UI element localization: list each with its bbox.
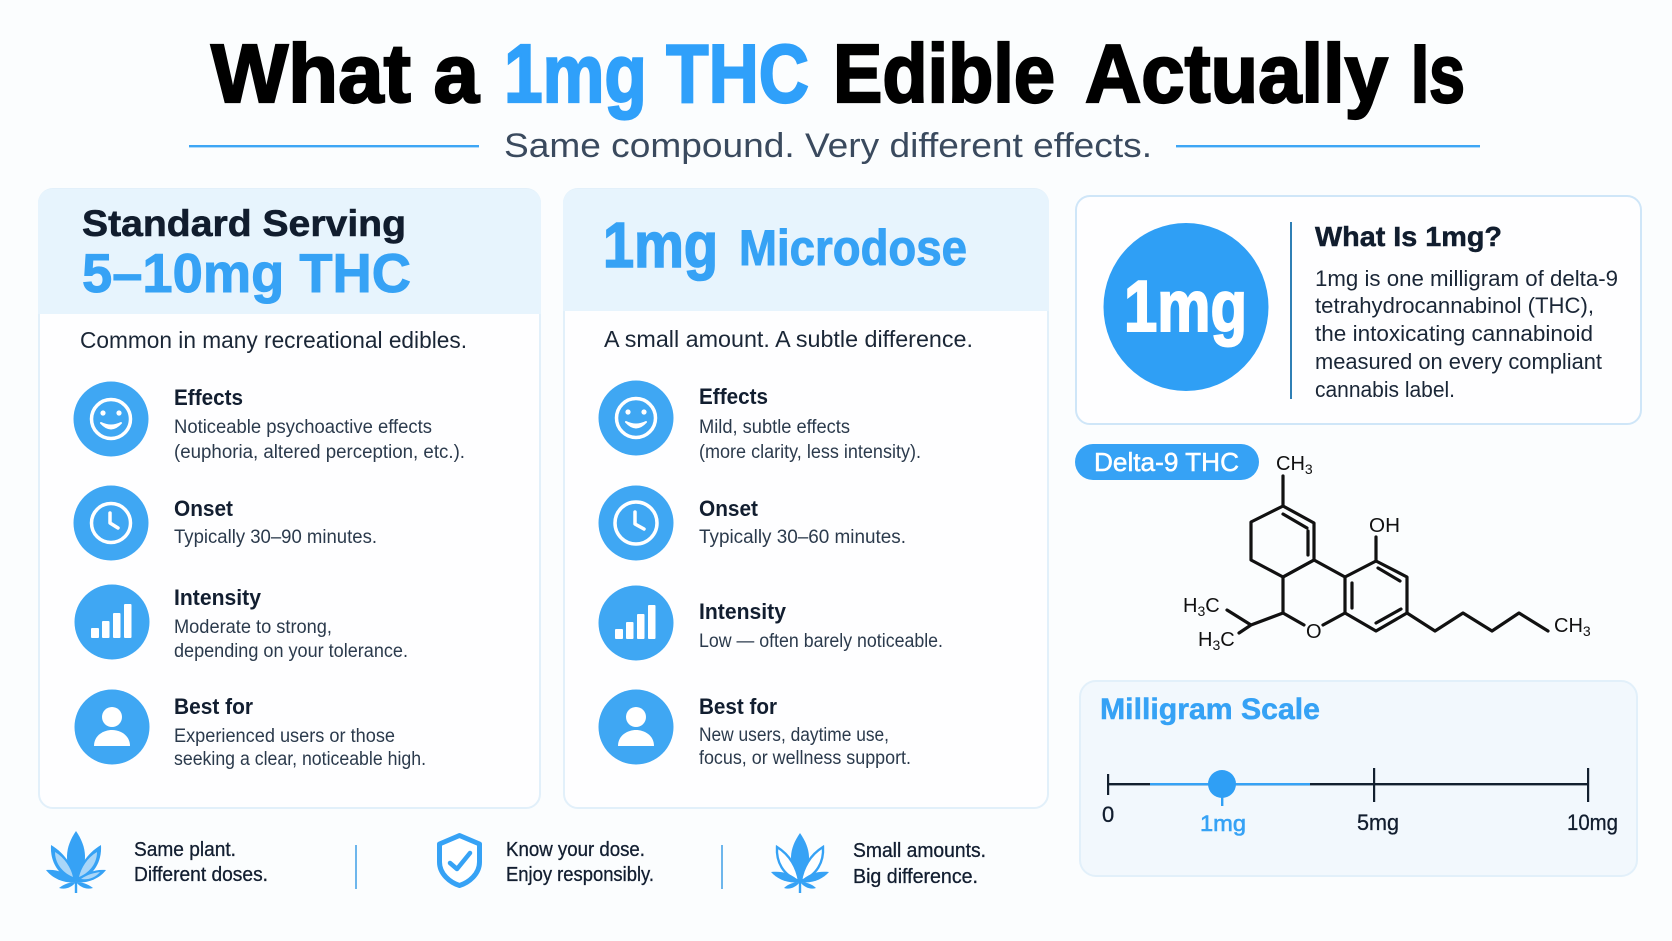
best for text: New users, daytime use,	[699, 725, 889, 746]
best for text	[174, 694, 426, 770]
text	[853, 840, 986, 888]
icon: bars	[74, 584, 150, 660]
1mg badge: 1mg	[1124, 267, 1247, 347]
panel: 1mg microdose	[563, 189, 1049, 808]
effects text	[174, 385, 465, 463]
intensity text: Intensity	[174, 585, 262, 610]
title	[211, 27, 1465, 120]
icon: bars	[598, 586, 674, 660]
label: 5mg: 5mg	[1357, 810, 1399, 835]
title: What a	[211, 27, 480, 120]
effects text: (euphoria, altered perception, etc.).	[174, 442, 465, 463]
text: Small amounts.	[853, 840, 986, 862]
panel: what is 1mg	[1076, 196, 1641, 424]
best for text: seeking a clear, noticeable high.	[174, 749, 426, 770]
pill: delta-9 THC	[1075, 444, 1259, 480]
effects text: Mild, subtle effects	[699, 417, 850, 438]
best for text: focus, or wellness support.	[699, 748, 911, 769]
heading: 1mg microdose: Microdose	[739, 220, 967, 276]
effects text: Effects	[174, 385, 243, 410]
label: H3C lower: C	[1220, 629, 1235, 651]
onset text: Typically 30–90 minutes.	[174, 527, 377, 548]
label: CH3 right: CH	[1554, 615, 1583, 637]
text: Enjoy responsibly.	[506, 864, 654, 886]
subtitle with rules: Same compound. Very different effects.	[504, 127, 1152, 165]
definition text: tetrahydrocannabinol (THC),	[1315, 293, 1594, 318]
effects text: Effects	[699, 384, 768, 409]
title: Edible	[833, 27, 1055, 120]
definition text: cannabis label.	[1315, 377, 1455, 402]
scale line	[1107, 768, 1589, 806]
definition text: the intoxicating cannabinoid	[1315, 321, 1593, 346]
intensity text	[699, 599, 943, 652]
label: CH3 right: 3	[1583, 623, 1591, 639]
title: Actually	[1085, 27, 1388, 120]
heading: 5-10mg THC: 5–10mg THC	[82, 242, 411, 304]
heading: what is 1mg: What Is 1mg?	[1315, 221, 1502, 252]
icon: clock	[598, 486, 674, 560]
onset text: Typically 30–60 minutes.	[699, 527, 906, 548]
label: O: O	[1306, 621, 1322, 643]
icon: clock	[74, 486, 148, 560]
pill: delta-9 THC: Delta-9 THC	[1094, 447, 1239, 477]
onset text: Onset	[174, 496, 234, 521]
onset text: Onset	[699, 496, 759, 521]
intensity text: Low — often barely noticeable.	[699, 631, 943, 652]
text: Know your dose.	[506, 839, 645, 861]
footer: small amounts	[771, 833, 986, 893]
panel: standard serving	[38, 189, 541, 808]
text	[134, 839, 268, 886]
icon: leaf	[771, 833, 829, 893]
effects text: (more clarity, less intensity).	[699, 442, 921, 463]
icon: shield	[440, 836, 480, 886]
label: H3C upper: H	[1183, 595, 1197, 617]
best for text: Experienced users or those	[174, 726, 395, 747]
definition text: 1mg is one milligram of delta-9	[1315, 266, 1618, 291]
intensity text	[174, 585, 408, 662]
icon: leaf	[46, 831, 106, 893]
definition text: measured on every compliant	[1315, 349, 1603, 374]
best for text: Best for	[174, 694, 253, 719]
label: 1mg: 1mg	[1200, 811, 1246, 836]
heading: standard serving: Standard Serving	[82, 203, 406, 244]
onset text	[174, 496, 377, 548]
label: OH: OH	[1369, 515, 1400, 537]
onset text	[699, 496, 906, 548]
footer: same plant	[46, 831, 268, 893]
label: CH3 top: CH	[1276, 453, 1305, 475]
icon: smile	[598, 380, 674, 456]
label: 0: 0	[1102, 802, 1114, 827]
label: CH3 top: 3	[1305, 461, 1313, 477]
text	[506, 839, 654, 886]
title: 1mg THC	[504, 27, 809, 120]
best for text: Best for	[699, 694, 777, 719]
best for text	[699, 694, 911, 769]
1mg badge	[1104, 223, 1268, 391]
intensity text: depending on your tolerance.	[174, 641, 408, 662]
text: Same plant.	[134, 839, 236, 861]
lead text: A small amount. A subtle difference.	[604, 326, 973, 352]
label: 10mg: 10mg	[1567, 810, 1618, 835]
label: H3C upper: 3	[1197, 603, 1205, 619]
heading: 1mg microdose: 1mg	[603, 209, 718, 281]
lead text: Common in many recreational edibles.	[80, 327, 467, 353]
label: H3C upper: C	[1205, 595, 1220, 617]
definition text	[1315, 266, 1618, 402]
title: Is	[1411, 27, 1465, 120]
label: H3C lower: 3	[1212, 637, 1220, 653]
heading: 1mg microdose	[603, 209, 967, 281]
icon: person	[598, 690, 674, 764]
effects text: Noticeable psychoactive effects	[174, 417, 432, 438]
heading: milligram scale: Milligram Scale	[1100, 693, 1320, 726]
effects text	[699, 384, 921, 463]
label: H3C lower: H	[1198, 629, 1212, 651]
intensity text: Moderate to strong,	[174, 617, 332, 638]
icon: person	[74, 690, 150, 764]
text: Different doses.	[134, 864, 268, 886]
intensity text: Intensity	[699, 599, 787, 624]
icon: smile	[74, 382, 148, 456]
footer: know your dose	[440, 836, 654, 886]
panel: milligram scale	[1080, 681, 1637, 876]
molecule diagram	[1183, 453, 1591, 653]
text: Big difference.	[853, 866, 978, 888]
